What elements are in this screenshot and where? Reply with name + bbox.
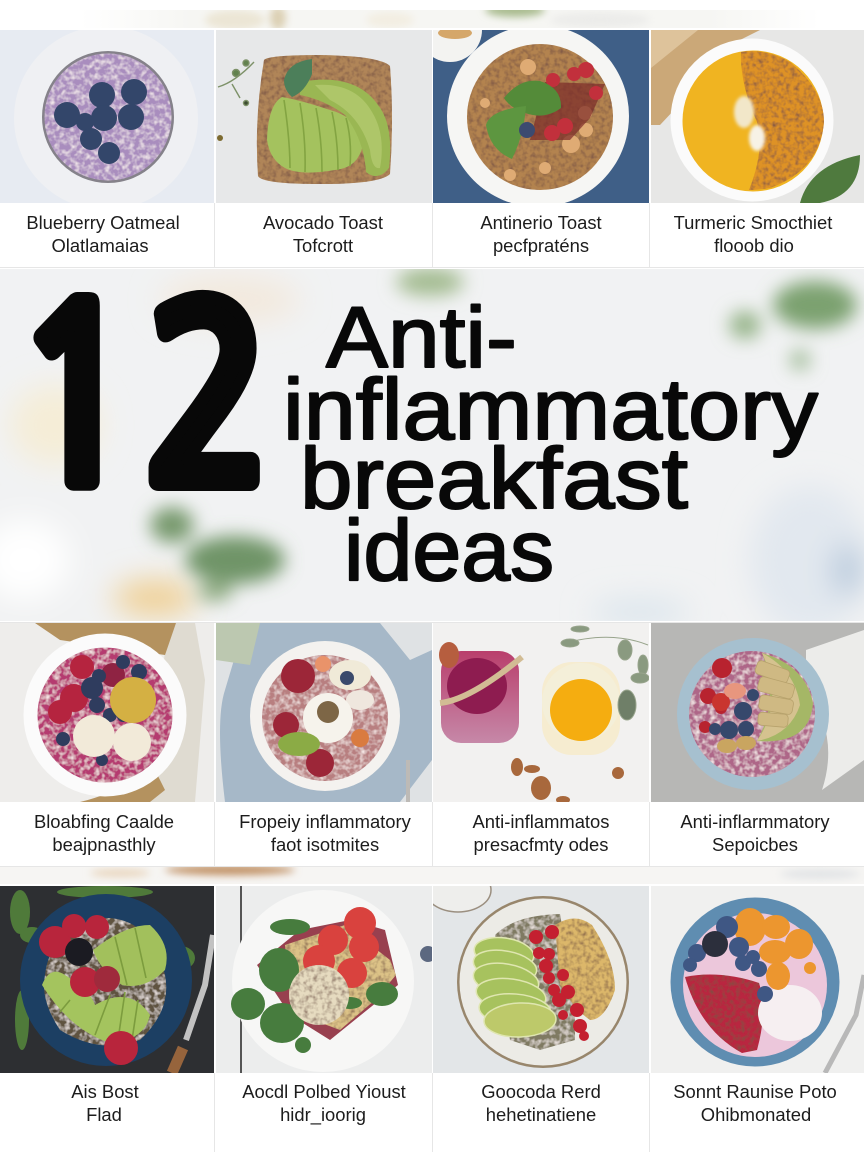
icon: nuts	[439, 642, 624, 804]
card: avocado toast	[216, 30, 432, 256]
caption: Turmeric Smocthiet	[674, 212, 832, 233]
caption: Sonnt Raunise Poto	[673, 1081, 837, 1102]
caption: beajpnasthly	[52, 834, 156, 855]
blurred background	[0, 268, 864, 635]
title text	[288, 304, 819, 582]
card: berry bowl	[0, 623, 214, 855]
caption: Sepoicbes	[712, 834, 798, 855]
icon: spinach leaves	[486, 81, 561, 159]
card: salad plate	[216, 886, 436, 1126]
icon: blueberries	[54, 79, 147, 164]
icon: avocado slices	[471, 934, 557, 1038]
icon: sage sprig	[561, 626, 649, 720]
card: porridge bowl on cloth	[216, 623, 432, 855]
caption: faot isotmites	[271, 834, 379, 855]
card: avocado dark plate	[0, 886, 214, 1125]
caption: Avocado Toast	[263, 212, 383, 233]
caption: Antinerio Toast	[480, 212, 602, 233]
middle blurred image strip	[0, 867, 864, 884]
caption: flooob dio	[714, 235, 794, 256]
caption: pecfpraténs	[493, 235, 589, 256]
caption: Aocdl Polbed Yioust	[242, 1081, 406, 1102]
caption: Ais Bost	[71, 1081, 139, 1102]
caption: Ohibmonated	[701, 1104, 811, 1125]
top blurred image strip	[155, 10, 746, 28]
icon: white seasoning	[734, 96, 765, 151]
title text: Anti-	[326, 290, 517, 386]
card: antinerio toast bowl	[433, 30, 649, 256]
icon: avocado slices	[42, 925, 167, 1043]
card: avocado grain plate	[433, 886, 649, 1121]
caption: Goocoda Rerd	[481, 1081, 601, 1102]
caption: Olatlamaias	[51, 235, 149, 256]
card: turmeric smoothie	[651, 30, 864, 256]
title text: breakfast	[300, 431, 688, 527]
icon: salad greens	[231, 919, 398, 1053]
hero panel	[0, 268, 864, 635]
caption: Anti-inflarmmatory	[680, 811, 830, 832]
card: blueberry oatmeal	[0, 26, 214, 256]
title text: inflammatory	[283, 362, 818, 458]
icon: spoon	[825, 975, 864, 1073]
big number 12: 12	[12, 280, 273, 520]
caption: presacfmty odes	[474, 834, 608, 855]
icon: fork	[172, 935, 213, 1073]
card: avocado berry bowl	[651, 623, 864, 855]
caption: hehetinatiene	[486, 1104, 596, 1125]
banana slices	[73, 677, 156, 761]
caption: Anti-inflammatos	[473, 811, 609, 832]
icon: herbs	[10, 886, 195, 1050]
icon: orange juice glass	[542, 662, 620, 755]
icon: berry smoothie jar	[440, 651, 522, 743]
card: smoothie and juice glasses	[433, 623, 649, 855]
caption: Fropeiy inflammatory	[239, 811, 412, 832]
icon: herb sprig	[217, 60, 254, 141]
card: fruit yogurt bowl	[651, 886, 864, 1125]
caption: hidr_ioorig	[280, 1104, 366, 1126]
caption: Flad	[86, 1104, 122, 1125]
caption: Blueberry Oatmeal	[26, 212, 180, 233]
icon: leaf	[800, 155, 860, 203]
title text: ideas	[344, 503, 554, 599]
caption: Tofcrott	[293, 235, 353, 256]
caption: Bloabfing Caalde	[34, 811, 174, 832]
